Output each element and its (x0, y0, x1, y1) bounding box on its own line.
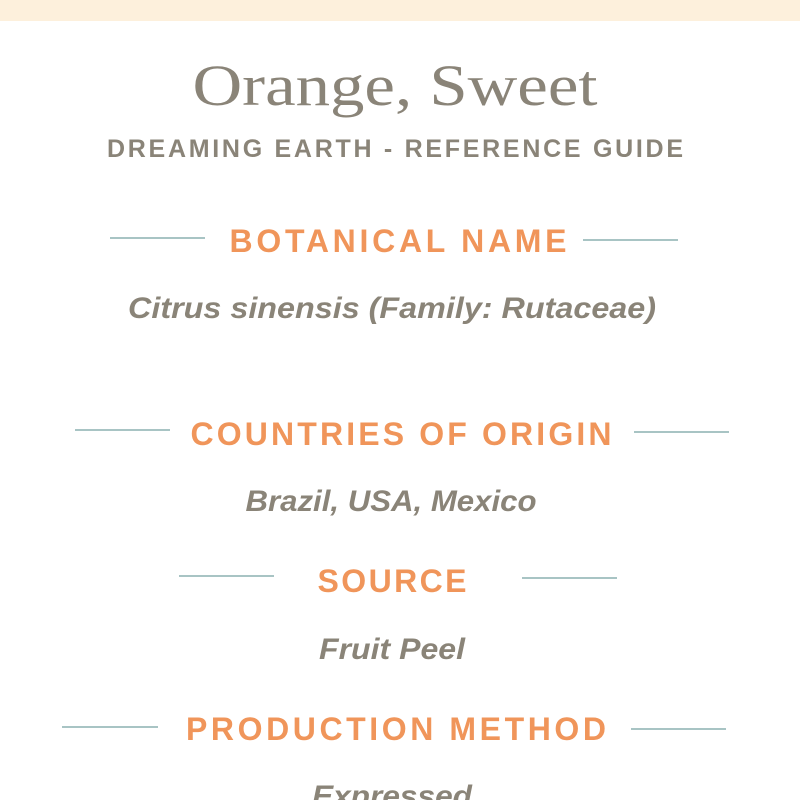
title: Orange, Sweet (192, 53, 598, 118)
section: botanical name (110, 223, 678, 325)
section: countries of origin: Brazil, USA, Mexico (246, 485, 536, 518)
section: botanical name: BOTANICAL NAME (230, 223, 566, 259)
section: countries of origin (75, 416, 729, 518)
subtitle: DREAMING EARTH - REFERENCE GUIDE (107, 135, 683, 163)
section: source (179, 563, 617, 666)
section: source: Fruit Peel (319, 633, 466, 666)
section: production method (62, 711, 726, 800)
section: countries of origin: COUNTRIES OF ORIGIN (190, 416, 612, 452)
section: production method: PRODUCTION METHOD (186, 711, 606, 747)
section: botanical name: Citrus sinensis (Family: Rutaceae) (128, 292, 656, 325)
top band (0, 0, 800, 21)
section: source: SOURCE (318, 563, 466, 599)
